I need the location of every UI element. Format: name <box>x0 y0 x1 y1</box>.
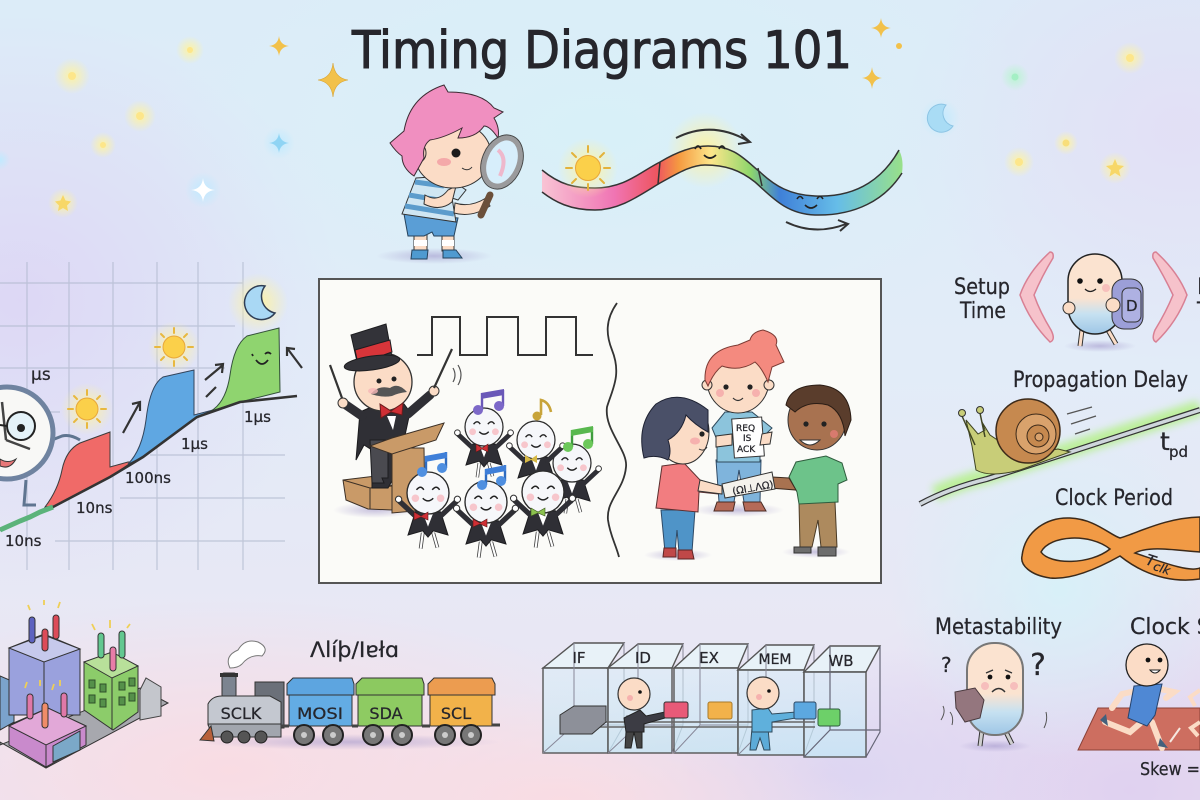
green tower <box>84 634 138 730</box>
purple tower <box>9 618 80 715</box>
wagon SDA <box>356 678 424 745</box>
icon: sun <box>558 138 618 198</box>
singers with notes <box>395 389 601 558</box>
icon: blue note middle <box>477 465 506 490</box>
blue ramp <box>128 370 213 464</box>
icon: wobbling capsule <box>941 643 1047 752</box>
baseline <box>0 396 297 530</box>
person: red-haired with REQ ACK sign: IS <box>743 434 752 444</box>
arrows on ramp <box>123 348 302 433</box>
wavy divider <box>607 303 626 557</box>
left blue building <box>0 676 14 730</box>
setup time label: Setup <box>954 275 1010 300</box>
wagon MOSI: MOSI <box>297 704 343 723</box>
CPU pipeline stages <box>543 643 880 757</box>
box EX: EX <box>699 649 719 667</box>
second runner cut off <box>1190 690 1200 736</box>
metastability section <box>935 615 1062 752</box>
singer front right <box>510 471 576 548</box>
time labels: 10ns <box>5 532 42 550</box>
question marks: ? <box>941 653 952 677</box>
icon: blue note left <box>417 452 447 477</box>
setup time label <box>954 275 1010 324</box>
clock period label: Clock Period <box>1055 486 1173 511</box>
city of clock domains <box>0 600 168 768</box>
engine car SCLK: SCLK <box>221 704 262 723</box>
singer back middle <box>543 444 601 513</box>
signal wire <box>935 408 1200 494</box>
person: dark-haired on left <box>642 397 722 561</box>
scroll between hands: (ΩI⊥ΛΩ) <box>732 480 775 498</box>
wagon SCL <box>428 678 495 745</box>
box ID: ID <box>635 649 651 667</box>
propagation delay section <box>920 368 1200 504</box>
icon: sun two <box>148 321 200 373</box>
icon: moon <box>228 273 288 333</box>
time labels: 10ns <box>76 499 113 517</box>
clock waveform <box>417 317 593 355</box>
clock period section <box>1022 486 1200 580</box>
right bracket <box>1153 252 1187 342</box>
icon: clock character <box>0 387 80 505</box>
box IF <box>543 643 624 753</box>
worker two <box>747 677 796 750</box>
tpd label: t <box>1160 427 1170 456</box>
wagon SDA: SDA <box>369 704 403 723</box>
clock skew section <box>1078 615 1200 780</box>
data bus train <box>200 638 500 750</box>
time labels: μs <box>31 365 51 385</box>
green ramp <box>211 328 280 411</box>
box WB: WB <box>828 652 854 670</box>
icon: green note <box>563 426 593 452</box>
singer front middle <box>453 481 519 558</box>
bow ties <box>414 444 488 527</box>
setup time label: Time <box>959 299 1006 324</box>
rainbow waveform ribbon <box>542 112 903 231</box>
wagon MOSI <box>287 678 354 745</box>
person: red-haired with REQ ACK sign: ACK <box>737 445 756 455</box>
train label: Λlíþ/Iɐłɑ <box>310 638 399 662</box>
character: child with magnifying glass <box>376 85 531 264</box>
person: green shirt on right <box>770 385 851 558</box>
engine car SCLK <box>200 673 284 743</box>
icon: snail <box>958 399 1096 474</box>
singer back left <box>455 408 513 477</box>
clock period section: T <box>1143 551 1158 571</box>
box EX <box>674 644 748 753</box>
runner <box>1100 644 1174 748</box>
central panel <box>319 279 881 583</box>
red ramp <box>45 432 132 507</box>
box ID <box>608 644 683 753</box>
left bracket <box>1020 252 1053 342</box>
pink building <box>9 600 130 767</box>
box WB <box>804 646 880 757</box>
capsule character with backpack: D <box>1126 297 1138 315</box>
capsule character with backpack <box>1063 254 1143 352</box>
person: red-haired with REQ ACK sign <box>692 330 784 517</box>
timing ramp chart <box>0 262 302 570</box>
question marks: ? <box>1030 648 1046 683</box>
conductor and podium <box>330 324 461 518</box>
smoke <box>228 641 265 668</box>
time labels: 1μs <box>181 435 208 453</box>
grid <box>0 262 285 570</box>
clock period section: clk <box>1152 559 1173 578</box>
tpd label: pd <box>1169 443 1188 461</box>
wagon SCL: SCL <box>441 704 471 723</box>
back grey building <box>140 678 161 720</box>
metastability label: Metastability <box>935 615 1062 640</box>
box IF: IF <box>572 649 586 667</box>
time labels: 1μs <box>244 408 271 426</box>
title: Timing Diagrams 101 <box>351 21 852 81</box>
person: red-haired with REQ ACK sign: REQ <box>736 424 755 434</box>
infinity ribbon <box>1022 517 1200 580</box>
arrow: over the wave <box>676 130 750 144</box>
box MEM: MEM <box>758 652 792 668</box>
decorative sparkles and stars <box>0 18 1146 218</box>
data blocks <box>664 702 840 726</box>
ramp face <box>252 352 271 364</box>
conveyor <box>560 706 815 734</box>
running track <box>1078 708 1200 750</box>
setup time section <box>954 252 1200 352</box>
singer back right <box>507 421 565 490</box>
question marks <box>941 648 1046 683</box>
time labels <box>5 365 271 550</box>
singer front left <box>395 472 461 549</box>
worker one <box>618 678 665 748</box>
icon: purple music note <box>473 389 504 415</box>
hold time label cut off <box>1196 275 1200 324</box>
time labels: 100ns <box>125 469 171 487</box>
icon: sun one <box>61 383 113 435</box>
icon: gold note <box>532 400 551 420</box>
base plate <box>0 688 168 768</box>
box MEM <box>738 645 814 755</box>
scroll between hands <box>722 472 775 498</box>
tpd label <box>1160 427 1188 461</box>
arrow: under the wave <box>786 220 848 231</box>
